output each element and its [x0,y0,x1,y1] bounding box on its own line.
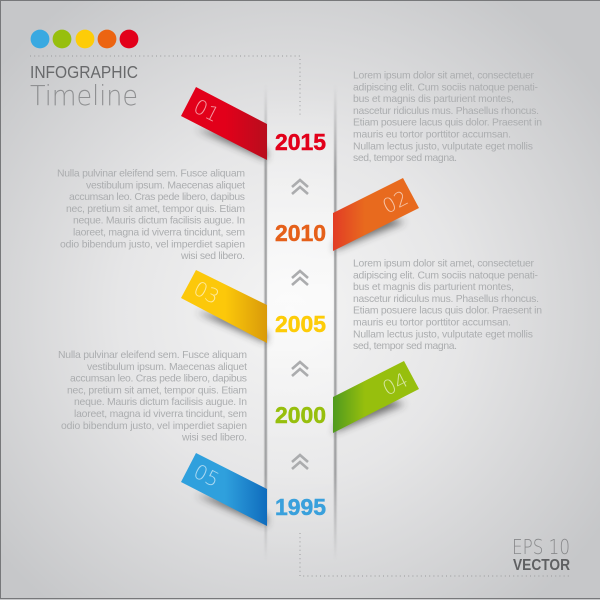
text block top right: Lorem ipsum dolor sit amet, consectetuer [353,70,535,82]
text block middle right: bus et magnis dis parturient montes, [353,282,514,293]
text block lower left: neque. Mauris dictum facilisis augue. In [74,397,247,408]
text block upper left: Nulla pulvinar eleifend sem. Fusce aliquam [57,168,245,180]
arrow chevrons 1 [292,180,308,194]
ribbon 03 [181,270,267,343]
title [30,62,138,112]
color dots [31,30,138,48]
text block middle right: adipiscing elit. Cum sociis natoque penati- [353,270,538,281]
text block middle right: sed, tempor sed magna. [353,341,457,352]
text block top right: adipiscing elit. Cum sociis natoque penati- [353,82,538,93]
EPS 10 VECTOR badge: VECTOR [513,557,570,574]
text block lower left [58,350,247,444]
ribbon 05 [181,453,267,526]
ribbon 05: 05 [190,459,223,492]
ribbon 02: 02 [378,186,412,218]
year 2010: 2010 [275,220,326,246]
text block upper left: accumsan leo. Cras pede libero, dapibus [69,192,245,203]
arrow chevrons 2 [292,271,308,285]
text block upper left: wisi sed libero. [180,251,245,262]
year 1995: 1995 [275,494,326,520]
EPS 10 VECTOR badge [512,535,570,574]
text block top right: bus et magnis dis parturient montes, [353,94,514,105]
text block middle right: Lorem ipsum dolor sit amet, consectetuer [353,258,535,270]
text block top right: Etiam posuere lacus quis dolor. Praesent in [353,118,542,129]
EPS 10 VECTOR badge: EPS 10 [512,535,570,559]
text block lower left: accumsan leo. Cras pede libero, dapibus [70,374,247,385]
text block upper left: neque. Mauris dictum facilisis augue. In [73,216,245,227]
text block upper left: vestibulum ipsum. Maecenas aliquet [86,180,245,191]
text block upper left: odio bibendum justo, vel imperdiet sapien [60,239,245,250]
text block upper left: nec, pretium sit amet, tempor quis. Etiam [66,204,245,215]
text block middle right: mauris eu tortor porttitor accumsan. [353,318,511,328]
dotted frame top [30,56,300,115]
text block middle right: Nullam lectus justo, vulputate eget mollis [353,329,533,340]
ribbon 01 [181,87,267,160]
text block top right: mauris eu tortor porttitor accumsan. [353,130,511,140]
title: INFOGRAPHIC [30,62,138,82]
text block top right: nascetur ridiculus mus. Phasellus rhoncus. [353,106,539,117]
text block upper left: laoreet, magna id viverra tincidunt, sem [73,228,245,238]
text block top right: sed, tempor sed magna. [353,153,457,164]
ribbon 04 [333,361,419,433]
text block middle right [353,258,542,352]
ribbon 03: 03 [190,276,223,309]
title: Timeline [30,79,138,112]
arrow chevrons 4 [292,455,308,469]
ribbon 02 [333,178,419,251]
ribbon 04: 04 [378,368,412,400]
central strip [264,85,336,560]
text block lower left: nec, pretium sit amet, tempor quis. Etiam [67,385,247,396]
text block top right [353,70,542,164]
text block lower left: wisi sed libero. [181,433,247,444]
text block upper left [57,168,245,262]
ribbon 01: 01 [190,94,223,127]
dotted frame bottom [300,533,572,576]
text block lower left: laoreet, magna id viverra tincidunt, sem [74,409,247,420]
arrow chevrons 3 [292,362,308,376]
text block top right: Nullam lectus justo, vulputate eget mollis [353,141,533,152]
year 2005: 2005 [275,311,326,337]
text block lower left: Nulla pulvinar eleifend sem. Fusce aliquam [58,350,247,361]
year 2000: 2000 [275,402,326,428]
text block lower left: vestibulum ipsum. Maecenas aliquet [87,362,247,373]
year 2015: 2015 [275,129,326,155]
text block middle right: Etiam posuere lacus quis dolor. Praesent in [353,306,542,317]
text block lower left: odio bibendum justo, vel imperdiet sapien [61,421,247,432]
text block middle right: nascetur ridiculus mus. Phasellus rhoncus. [353,294,539,305]
